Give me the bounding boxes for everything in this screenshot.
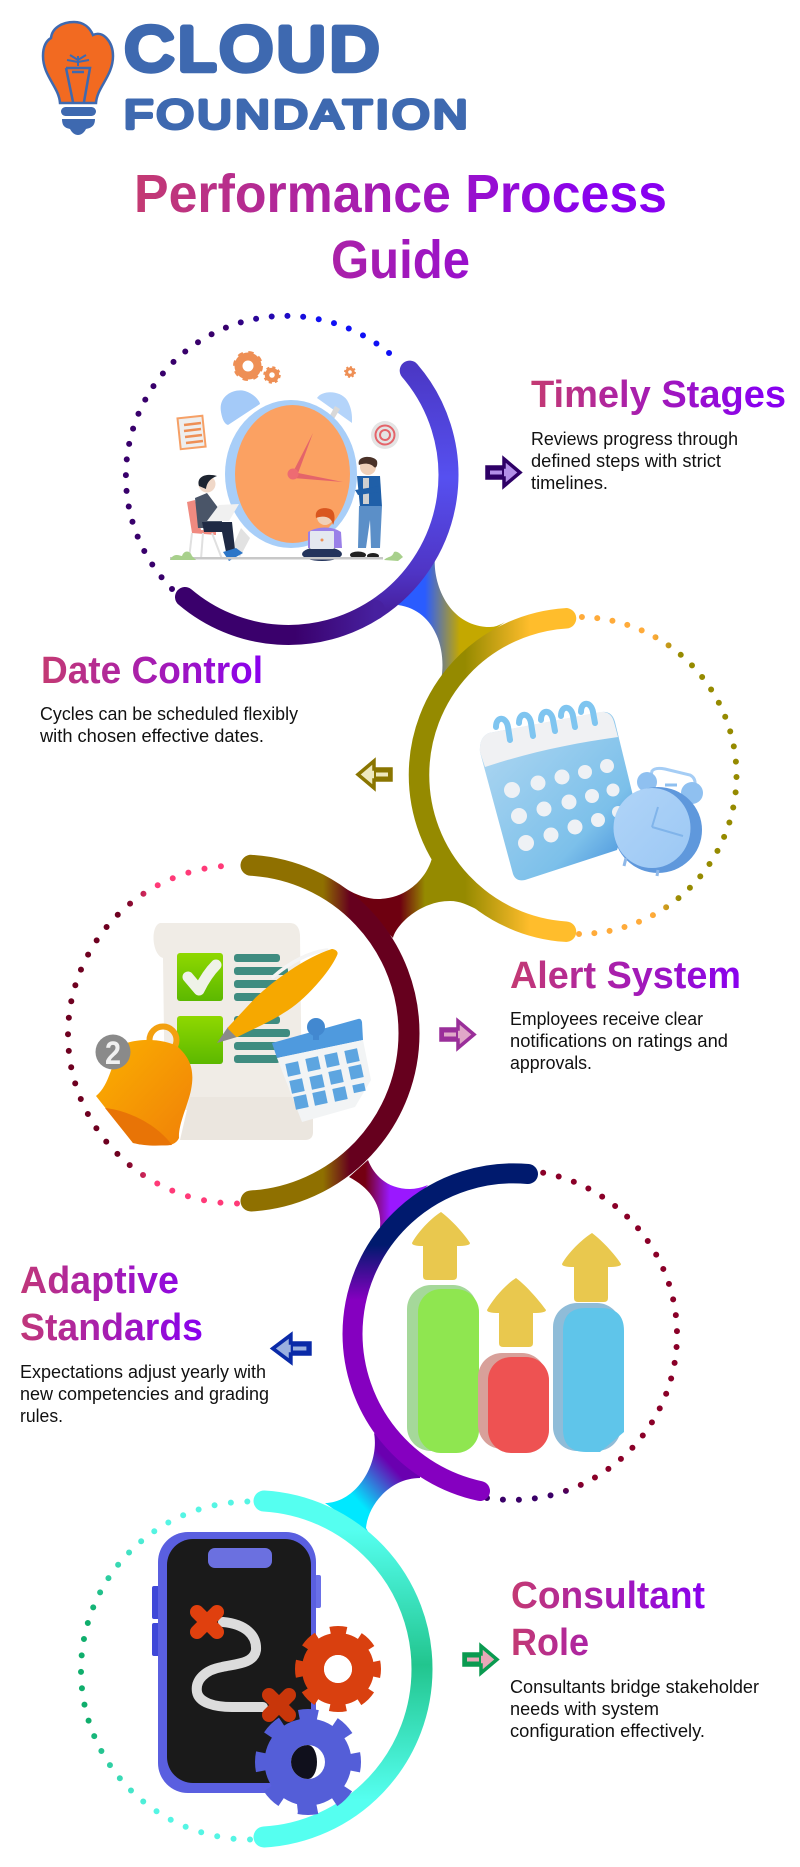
dotted ring: [487, 1172, 677, 1500]
heading: Consultant: [511, 1575, 705, 1617]
connector: circle 3 to circle 4: [349, 1160, 428, 1232]
thick arc: [264, 1501, 422, 1837]
title: Guide: [331, 230, 470, 290]
body text: timelines.: [531, 473, 608, 493]
panel: date control: [39, 617, 736, 934]
connector: circle 4 to circle 5: [325, 1433, 420, 1535]
heading: Adaptive: [20, 1260, 179, 1302]
icon: light bulb: [43, 22, 113, 135]
dotted ring: [81, 1502, 250, 1840]
heading: Role: [511, 1622, 589, 1664]
wordmark: CLOUD: CLOUD: [125, 15, 383, 83]
dotted ring: [126, 316, 399, 589]
heading: Timely Stages: [531, 374, 786, 416]
dotted ring: [68, 866, 237, 1204]
illustration: bar chart with arrows: [407, 1212, 624, 1453]
logo: Cloud Foundation: [43, 15, 471, 137]
illustration: checklist, bell and calendar: [96, 923, 371, 1146]
title: [134, 164, 667, 290]
body text: [510, 1009, 728, 1073]
panel: alert system: [68, 865, 741, 1204]
body text: [20, 1362, 269, 1426]
thick arc: [352, 1173, 528, 1491]
body text: Reviews progress through: [531, 429, 738, 449]
heading: Alert System: [510, 955, 741, 997]
connector: circle 2 to circle 3: [343, 858, 478, 938]
illustration: checklist, bell and calendar: 2: [105, 1035, 121, 1071]
body text: [510, 1677, 759, 1741]
body text: rules.: [20, 1406, 63, 1426]
arrow: [358, 761, 391, 788]
body text: notifications on ratings and: [510, 1031, 728, 1051]
thick arc: [251, 865, 409, 1201]
dotted ring: [579, 617, 736, 934]
arrow: [273, 1335, 310, 1362]
panel: timely stages: [126, 316, 786, 635]
body text: defined steps with strict: [531, 451, 721, 471]
illustration: phone with route and gears: [152, 1532, 376, 1813]
body text: [39, 704, 298, 746]
illustration: alarm clock with team: [170, 353, 403, 561]
panel: consultant role: [81, 1501, 759, 1840]
body text: with chosen effective dates.: [39, 726, 264, 746]
wordmark: FOUNDATION: FOUNDATION: [124, 93, 471, 137]
body text: Employees receive clear: [510, 1009, 703, 1029]
thick arc: [185, 371, 448, 635]
heading: [20, 1260, 203, 1349]
body text: new competencies and grading: [20, 1384, 269, 1404]
heading: [511, 1575, 705, 1664]
body text: Consultants bridge stakeholder: [510, 1677, 759, 1697]
title: Performance Process: [134, 164, 667, 224]
body text: needs with system: [510, 1699, 659, 1719]
panel: adaptive standards: [20, 1172, 677, 1500]
body text: approvals.: [510, 1053, 592, 1073]
body text: Cycles can be scheduled flexibly: [40, 704, 298, 724]
heading: Standards: [20, 1307, 203, 1349]
body text: Expectations adjust yearly with: [20, 1362, 266, 1382]
body text: [531, 429, 738, 493]
arrow: [464, 1646, 497, 1673]
body text: configuration effectively.: [510, 1721, 705, 1741]
thick arc: [419, 618, 566, 932]
heading: Date Control: [41, 650, 263, 692]
illustration: calendar and clock: [480, 704, 703, 880]
connector: circle 1 to circle 2: [398, 555, 505, 690]
arrow: [487, 459, 520, 486]
arrow: [441, 1021, 474, 1048]
